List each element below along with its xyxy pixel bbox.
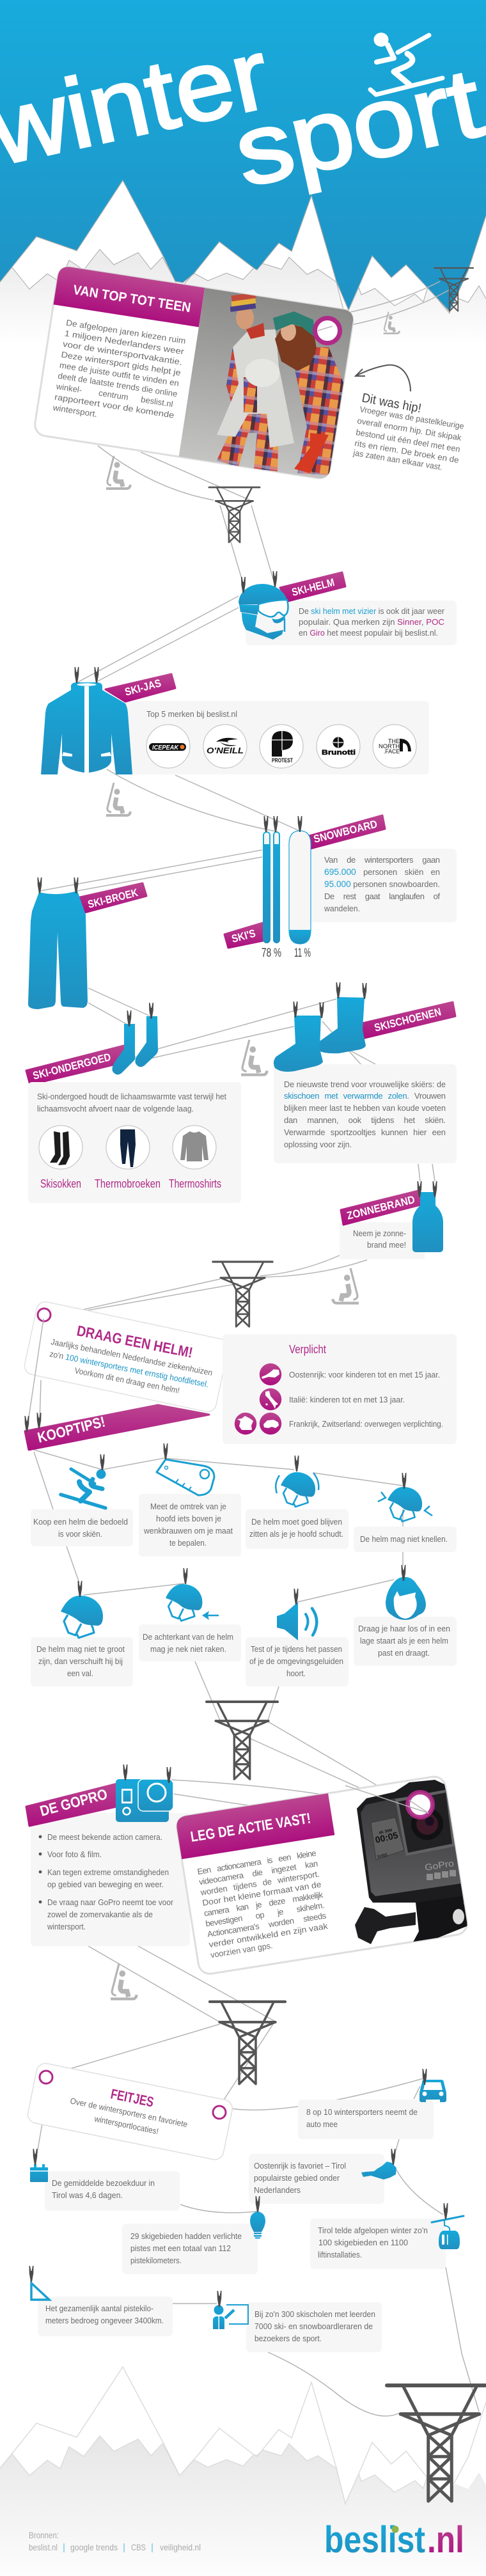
item: thermoshirts (169, 1126, 221, 1190)
bullet list (39, 1832, 174, 1931)
photo: gopro camera: 00:05 (374, 1830, 399, 1845)
tip 5: niet te groot (31, 1637, 133, 1686)
row: frankrijk en zwitserland (235, 1413, 443, 1434)
note: dit was hip: Vroeger was de pastelkleurige (359, 404, 465, 431)
logo: protest (260, 725, 303, 768)
label: kooptips (25, 1405, 209, 1450)
bullet list: De meest bekende action camera. (47, 1832, 162, 1842)
logo: brunotti: Brunotti (322, 749, 356, 757)
fact: auto: 8 op 10 wintersporters neemt de (306, 2107, 418, 2117)
fact: verlichte pistes: pistekilometers. (130, 2256, 182, 2265)
icon: helmet neck arrow (166, 1584, 219, 1621)
heading: VAN TOP TOT TEEN (72, 283, 192, 315)
fact: bezoekduur: De gemiddelde bezoekduur in (52, 2178, 155, 2188)
tip 8: haar los: Draag je haar los of in een (358, 1624, 450, 1633)
fact: skigebieden tirol: 100 skigebieden en 1100 (318, 2238, 408, 2247)
heading and text: draag een helm (49, 1322, 214, 1395)
note: dit was hip: Dit was hip! (361, 391, 423, 416)
panel: ski-helm info: populair. Qua merken zijn Sinner, POC (299, 617, 444, 627)
panel: skischoenen info (274, 1064, 457, 1163)
label: ski's: SKI'S (230, 927, 257, 945)
sources: veiligheid.nl (160, 2542, 201, 2552)
tip 3: helm goed zitten (246, 1509, 349, 1549)
icon: austria (361, 2162, 396, 2179)
panel: top 5 merken (122, 701, 429, 774)
intro text: De afgelopen jaren kiezen ruim (65, 318, 186, 345)
note: dit was hip: jas zaten aan elkaar vast. (352, 448, 443, 472)
label: ski's (224, 923, 263, 948)
photo: retro ski outfits (179, 288, 353, 478)
item: thermobroeken: Thermobroeken (95, 1177, 161, 1190)
tip 7: omgevingsgeluiden (246, 1637, 349, 1686)
tip 2: hoofd meten: wenkbrauwen om je maat (143, 1526, 233, 1535)
panel: ski-ondergoed (28, 1082, 241, 1203)
body text: verder ontwikkeld en zijn vaak (208, 1921, 329, 1949)
tip 2: hoofd meten: Meet de omtrek van je (150, 1502, 226, 1511)
intro text: mee de juiste outfit te vinden en (59, 360, 180, 388)
icon: skier (370, 33, 443, 95)
tip 7: omgevingsgeluiden: of je de omgevingsgeluiden (249, 1656, 343, 1666)
fact: skischolen: Bij zo'n 300 skischolen met leerden (255, 2309, 375, 2319)
fact: oostenrijk favoriet (249, 2154, 384, 2204)
icon: speaker (277, 1602, 317, 1640)
intro text: winkel- (55, 381, 82, 395)
tip 1: helm voor skien: is voor skiën. (58, 1529, 102, 1539)
stat: ski and snowboard share: 78 % (262, 946, 281, 960)
fact: verlichte pistes (122, 2224, 258, 2274)
panel: skischoenen info: Verwarmde sportzooltjes kunnen hier een (284, 1127, 446, 1137)
heading and text: feitjes (69, 2085, 189, 2136)
fact: oostenrijk favoriet: populairste gebied onder (254, 2173, 340, 2183)
logo: o'neill: O'NEILL (207, 746, 244, 755)
icon: skis (263, 831, 280, 943)
label: ski-jas (106, 674, 175, 702)
icon: skier tip 1 (61, 1469, 106, 1508)
body text: videocamera die ingezet kan (198, 1858, 318, 1887)
stat: ski and snowboard share (262, 946, 311, 960)
label: ski-jas: SKI-JAS (123, 677, 162, 698)
intro text: voor de wintersportvakantie. (62, 339, 183, 367)
item: thermobroeken (95, 1126, 161, 1190)
panel: van top tot teen (34, 266, 354, 480)
chair lift 1 (384, 312, 400, 333)
fact: pistekilometers (38, 2297, 173, 2336)
chair lift 3 (106, 783, 130, 815)
body text (196, 1848, 331, 1960)
stat: ski and snowboard share: 11 % (294, 946, 311, 960)
intro text: Deze wintersport gids helpt je (61, 350, 182, 377)
fact: oostenrijk favoriet: Oostenrijk is favoriet – Tirol (254, 2161, 346, 2171)
bullet list: De vraag naar GoPro neemt toe voor (47, 1897, 174, 1907)
tip 5: niet te groot: een val. (67, 1669, 93, 1678)
fact: skigebieden tirol (310, 2219, 446, 2269)
panel: ski-helm info: De ski helm met vizier is ook dit jaar weer (299, 606, 445, 616)
bullet list: op gebied van beweging en weer. (47, 1880, 164, 1889)
fact: skischolen: bezoekers de sport. (255, 2334, 322, 2343)
icon: snowboard (289, 831, 311, 944)
icon: light bulb (250, 2211, 265, 2238)
sources: google trends (70, 2542, 118, 2552)
panel: ski-ondergoed: Ski-ondergoed houdt de lichaamswarmte vast terwijl het (37, 1092, 226, 1101)
panel: skischoenen info: blijken meer last te hebben van koude voeten (284, 1103, 446, 1113)
tip 5: niet te groot: De helm mag niet te groot (36, 1644, 125, 1654)
row: oostenrijk (260, 1363, 440, 1385)
row: frankrijk en zwitserland: Frankrijk, Zwitserland: overwegen verplichting. (289, 1419, 443, 1429)
tower 2 (209, 487, 260, 542)
icon: measuring tape (157, 1459, 214, 1495)
icon: sock right (135, 1016, 158, 1067)
fact: skischolen (246, 2302, 382, 2352)
panel: zonnebrand (340, 1222, 425, 1259)
photo: gopro camera (355, 1780, 467, 1944)
panel: snowboard info: wandelen. (324, 904, 360, 913)
logo: the north face: .FACE (384, 748, 400, 755)
photo: gopro camera: 1H55 (377, 1853, 388, 1860)
icon: ski helmet (239, 584, 288, 640)
logo: the north face (373, 725, 416, 768)
intro text: centrum (98, 388, 129, 402)
chair lift 4 (241, 1040, 267, 1075)
tip 2: hoofd meten (139, 1494, 241, 1557)
intro text: rapporteert voor de komende (54, 392, 175, 420)
icon: head with hair (386, 1577, 426, 1620)
sources: CBS (131, 2542, 146, 2552)
intro text: wintersport. (52, 402, 98, 419)
body text: voorzien van gps. (210, 1940, 273, 1959)
fact: bezoekduur: Tirol was 4,6 dagen. (52, 2190, 123, 2200)
tip 6: achterkant: De achterkant van de helm (143, 1632, 233, 1642)
label: ski-helm: SKI-HELM (290, 576, 336, 599)
heading and text: feitjes: Over de wintersporters en favoriete (69, 2096, 189, 2129)
icon: set square (31, 2283, 49, 2300)
heading and text: draag een helm: Jaarlijks behandelen Nederlandse ziekenhuizen (50, 1337, 214, 1378)
panel: snowboard info: Van de wintersporters gaan (324, 855, 440, 865)
lift cables (34, 281, 479, 2416)
label: snowboard: SNOWBOARD (312, 818, 379, 845)
bullet list: zowel de zomervakantie als de (47, 1910, 153, 1919)
intro text: beslist.nl (140, 395, 174, 409)
icon: gondola (432, 2216, 464, 2249)
panel: snowboard info: 695.000 personen skiën en (324, 867, 440, 877)
bullet list: Kan tegen extreme omstandigheden (47, 1867, 169, 1877)
arrow: curved to photo (356, 365, 411, 391)
tip 2: hoofd meten: te bepalen. (169, 1538, 207, 1548)
tip 3: helm goed zitten: zitten als je je hoofd schudt. (249, 1529, 343, 1539)
bottom mountains (0, 2367, 486, 2576)
heading and text: draag een helm: Voorkom dit en draag een helm! (74, 1365, 180, 1395)
heading: LEG DE ACTIE VAST! (189, 1810, 312, 1845)
heading and text: feitjes: FEITJES (109, 2085, 155, 2110)
card: feitjes (26, 2062, 234, 2161)
panel: skischoenen info: skischoen met verwarmde zolen. Vrouwen (284, 1091, 446, 1101)
photo: gopro camera: 4K 30M (379, 1828, 393, 1835)
heading and text: feitjes: wintersportlocaties! (93, 2114, 159, 2136)
label: kooptips: KOOPTIPS! (36, 1413, 107, 1446)
icon: ski jacket (41, 682, 132, 774)
sources: beslist.nl (29, 2542, 58, 2552)
icon: ski pants (28, 891, 88, 1009)
panel: skischoenen info: dan mannen, ook tijdens het skiën. (284, 1115, 446, 1125)
icon: sock left (113, 1024, 136, 1074)
logo: protest: PROTEST (272, 757, 293, 764)
tip 6: achterkant (139, 1624, 241, 1661)
fact: auto (298, 2100, 434, 2139)
fact: skischolen: 7000 ski- en snowboardleraren de (255, 2321, 373, 2331)
tower 1 (434, 268, 473, 311)
title: winter sport: sport (225, 47, 486, 207)
panel: skischoenen info: oplossing voor zijn. (284, 1140, 352, 1149)
heading band (175, 1793, 334, 1859)
tip 7: omgevingsgeluiden: hoort. (286, 1669, 306, 1678)
heading and text: draag een helm: DRAAG EEN HELM! (75, 1322, 194, 1361)
body text: Een actioncamera is een kleine (196, 1848, 317, 1876)
row: italie (260, 1388, 405, 1410)
logo: icepeak: ICEPEAK (152, 744, 179, 751)
intro text: 1 miljoen Nederlanders weer (64, 328, 185, 356)
row: italie: Italië: kinderen tot en met 13 jaar. (289, 1395, 405, 1404)
fact: skigebieden tirol: liftinstallaties. (318, 2250, 362, 2259)
panel heading band (54, 265, 205, 327)
item: thermoshirts: Thermoshirts (169, 1177, 221, 1190)
logo: o'neill (203, 725, 247, 768)
intro text (52, 318, 187, 430)
fact: pistekilometers: Het gezamenlijk aantal pistekilo- (45, 2304, 153, 2313)
logo: icepeak (146, 725, 190, 768)
fact: skigebieden tirol: Tirol telde afgelopen winter zo'n (318, 2226, 428, 2235)
photo: gopro camera: GoPro (424, 1858, 455, 1873)
fact: pistekilometers: meters bedroeg ongeveer 3400km. (45, 2316, 164, 2325)
intro text: deelt de laatste trends die online (57, 371, 178, 398)
chair lift 2 (106, 456, 130, 489)
label: de gopro: DE GOPRO (38, 1786, 109, 1819)
note: dit was hip (352, 391, 465, 472)
note: dit was hip: overall enorm hip. Dit skipak (357, 416, 462, 443)
body text: Door het kleine formaat van de (201, 1880, 322, 1908)
ring on first card with cable (315, 318, 340, 343)
bullet list: Voor foto & film. (47, 1850, 102, 1859)
tower 4 (207, 1702, 278, 1779)
card: draag een helm (23, 1300, 230, 1413)
clothes pins (24, 571, 448, 2307)
item: skisokken (39, 1126, 82, 1190)
fact: verlichte pistes: pistes met een totaal van 112 (130, 2243, 231, 2253)
panel: snowboard info (310, 849, 457, 922)
icon: gopro camera (116, 1779, 173, 1822)
tower 3 (213, 1262, 272, 1326)
logo: beslist.nl: .nl (427, 2519, 464, 2561)
icon: helmet big (61, 1596, 103, 1638)
tower 5 (210, 2002, 285, 2084)
fact: auto: auto mee (306, 2119, 338, 2129)
note: dit was hip: rits en riem. De broek en de (354, 438, 460, 465)
rings on feitjes card (40, 2071, 226, 2119)
panel: verplicht: Verplicht (289, 1343, 326, 1356)
tip 6: achterkant: mag je nek niet raken. (150, 1644, 226, 1654)
tip 1: helm voor skien (31, 1509, 133, 1546)
panel: top 5 merken: Top 5 merken bij beslist.nl (146, 709, 237, 719)
icon: sunscreen bottle (412, 1192, 443, 1252)
logo: the north face: NORTH (379, 743, 400, 750)
tip 4: helm niet knellen (354, 1527, 457, 1552)
tip 5: niet te groot: zijn, dan verschuift hij bij (38, 1656, 123, 1666)
logo: the north face: THE (388, 738, 400, 744)
tip 3: helm goed zitten: De helm moet goed blijven (251, 1517, 342, 1527)
chair lift 5 (333, 1268, 359, 1303)
panel: ski-ondergoed: lichaamsvocht afvoert naar de volgende laag. (37, 1104, 194, 1113)
panel: zonnebrand: Neem je zonne- (353, 1229, 406, 1238)
label: zonnebrand: ZONNEBRAND (345, 1193, 416, 1222)
tip 4: helm niet knellen: De helm mag niet knellen. (360, 1534, 448, 1544)
label: skischoenen: SKISCHOENEN (373, 1006, 443, 1034)
panel: verplicht (223, 1334, 457, 1444)
card: leg de actie vast (176, 1775, 468, 1975)
panel: ski-helm info: en Giro het meest populair bij beslist.nl. (299, 628, 438, 638)
panel: snowboard info: De rest gaat langlaufen of (324, 891, 440, 901)
icon: helmet shaking (276, 1472, 318, 1507)
ring and cables on helm card (28, 1308, 51, 1422)
body text: bevestigen op je skihelm. (205, 1900, 325, 1929)
heading and text: draag een helm: zo'n 100 wintersporters met ernstig hoofdletsel. (49, 1349, 210, 1389)
icon: boot back (317, 997, 366, 1053)
item: skisokken: Skisokken (40, 1177, 81, 1190)
tower 6 (387, 2385, 486, 2501)
panel: zonnebrand: brand mee! (367, 1240, 406, 1250)
tip 1: helm voor skien: Koop een helm die bedoeld (33, 1517, 128, 1527)
top mountains and sky (0, 0, 486, 349)
ring on camera with cables (345, 1786, 432, 1818)
panel: ski-helm info (246, 601, 457, 645)
body text: Actioncamera's worden steeds (207, 1911, 327, 1939)
logo: brunotti (317, 725, 360, 768)
icon: car (419, 2080, 446, 2102)
icon: calendar (30, 2164, 48, 2182)
tip 8: haar los (354, 1617, 457, 1666)
icon: helmet pressing (378, 1487, 432, 1521)
tip 8: haar los: past en draagt. (378, 1648, 430, 1658)
label: ski-ondergoed: SKI-ONDERGOED (31, 1051, 112, 1082)
title: winter sport (0, 19, 486, 207)
sources: Bronnen: (29, 2530, 59, 2540)
icon: teacher at board (213, 2305, 248, 2329)
body text: worden tijdens de wintersport. (200, 1869, 320, 1897)
fact: oostenrijk favoriet: Nederlanders (254, 2185, 301, 2195)
bullet list: wintersport. (47, 1922, 86, 1931)
panel: snowboard info: 95.000 personen snowboarden. (324, 879, 440, 889)
fact: verlichte pistes: 29 skigebieden hadden verlichte (130, 2231, 242, 2241)
sources (29, 2530, 201, 2552)
body text: camera kan je deze makkelijk (203, 1890, 324, 1918)
icon: boot front (274, 1016, 323, 1072)
tip 8: haar los: lage staart als je een helm (360, 1636, 448, 1645)
row: oostenrijk: Oostenrijk: voor kinderen tot en met 15 jaar. (289, 1370, 440, 1379)
note: dit was hip: bestond uit één deel met een (356, 427, 461, 454)
panel: de gopro (31, 1813, 190, 1946)
tip 7: omgevingsgeluiden: Test of je tijdens het passen (251, 1644, 342, 1654)
label: ski-broek: SKI-BROEK (86, 886, 139, 911)
logo: beslist.nl: beslist (324, 2519, 425, 2561)
chair lift 6 (111, 1964, 137, 1999)
tip 2: hoofd meten: hoofd iets boven je (156, 1514, 221, 1523)
fact: bezoekduur (45, 2171, 180, 2211)
panel: skischoenen info: De nieuwste trend voor vrouwelijke skiërs: de (284, 1080, 446, 1089)
